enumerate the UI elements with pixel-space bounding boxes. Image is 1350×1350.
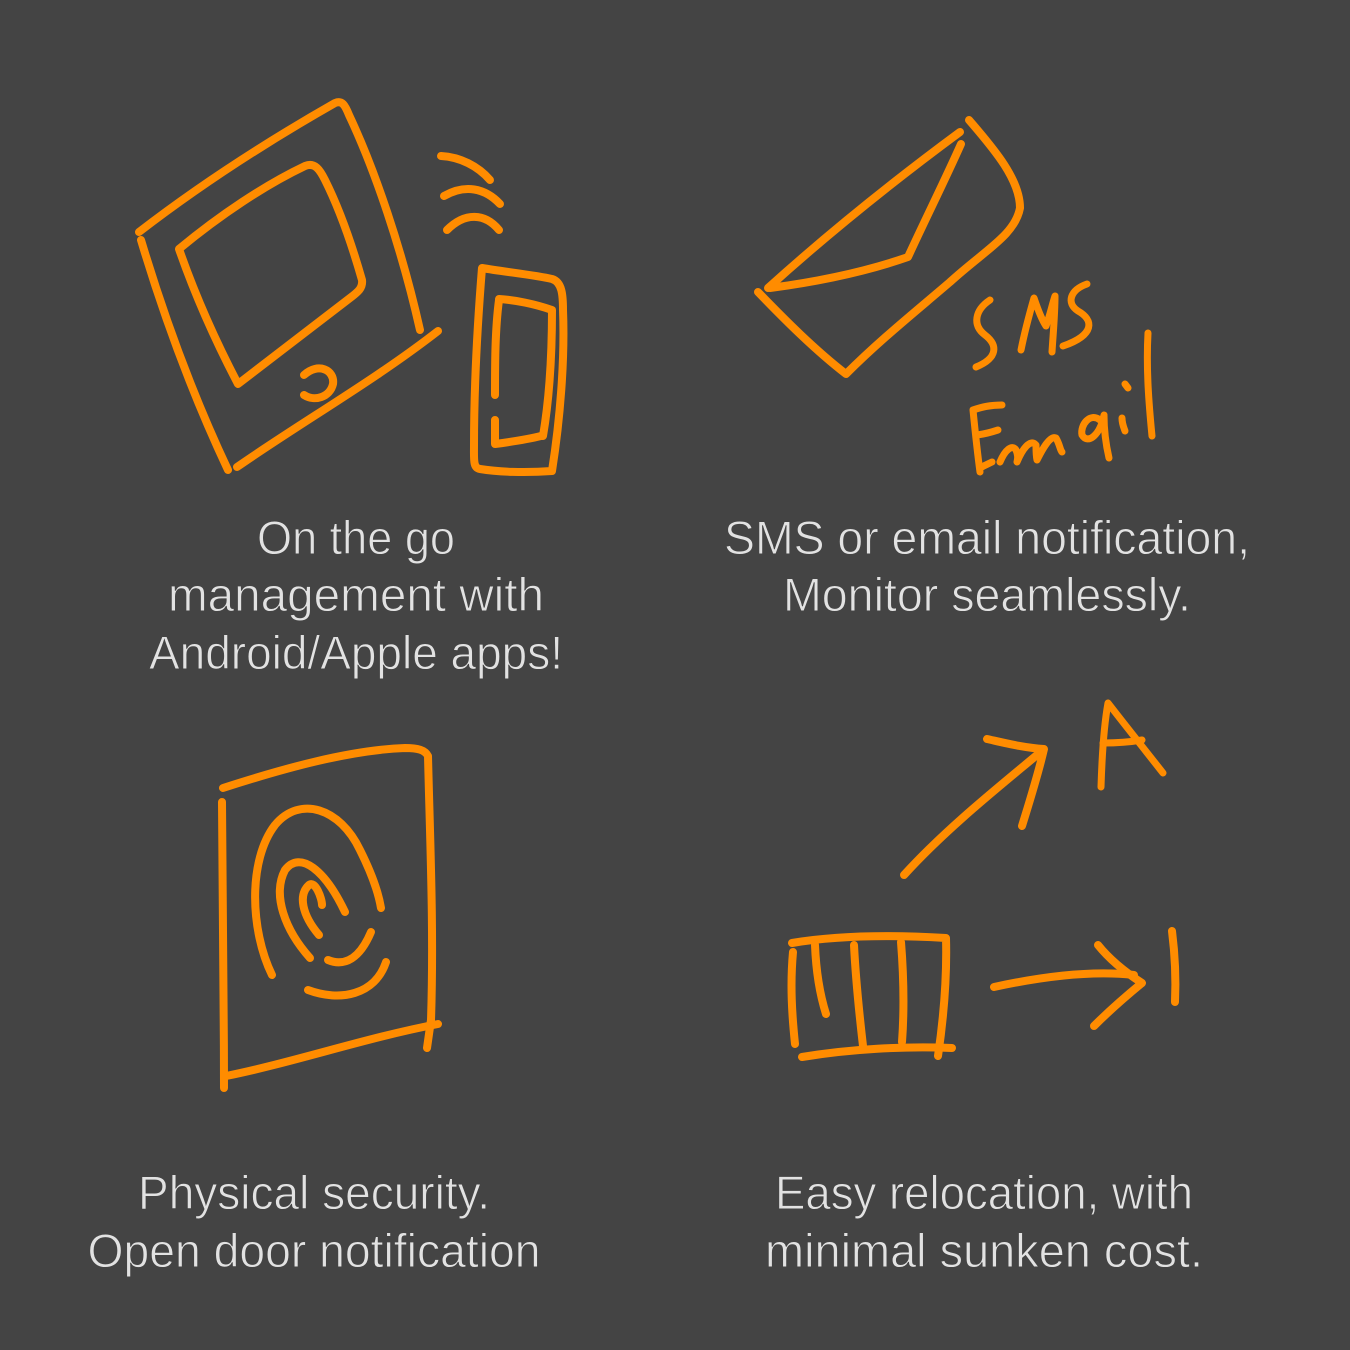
caption: physical security: Physical security. xyxy=(138,1166,490,1219)
icon: letter A xyxy=(1101,703,1163,787)
icon: arrow to location A xyxy=(904,739,1044,875)
icon: envelope with SMS and Email handwriting xyxy=(758,120,1152,472)
caption: easy relocation xyxy=(765,1166,1203,1277)
icon: arrow to location B xyxy=(994,945,1142,1026)
icon: envelope xyxy=(758,120,1020,374)
caption: SMS or email notification: SMS or email notification, xyxy=(724,511,1250,564)
icon: relocatable container with arrows xyxy=(792,703,1175,1057)
caption: on the go management: Android/Apple apps! xyxy=(149,626,563,679)
caption: SMS or email notification: Monitor seamlessly. xyxy=(783,568,1191,621)
icon: door panel xyxy=(222,748,438,1088)
icon: SMS handwriting xyxy=(976,284,1089,367)
caption: SMS or email notification xyxy=(724,511,1250,621)
caption: easy relocation: Easy relocation, with xyxy=(775,1166,1193,1219)
icon: Email handwriting xyxy=(973,333,1152,472)
caption: on the go management: On the go xyxy=(257,511,455,564)
icon: tablet body xyxy=(139,102,438,470)
caption: on the go management xyxy=(149,511,563,679)
caption: physical security: Open door notification xyxy=(88,1224,540,1277)
caption: on the go management: management with xyxy=(168,568,544,621)
caption: easy relocation: minimal sunken cost. xyxy=(765,1224,1203,1277)
icon: door with fingerprint xyxy=(222,748,438,1088)
icon: tablet and phone with wireless signal xyxy=(139,102,563,472)
icon: container xyxy=(792,936,952,1057)
icon: wireless signal arcs xyxy=(441,156,500,230)
icon: phone xyxy=(474,268,563,472)
caption: physical security xyxy=(88,1166,540,1277)
icon: letter I xyxy=(1172,931,1175,1002)
icon: fingerprint xyxy=(255,809,386,995)
